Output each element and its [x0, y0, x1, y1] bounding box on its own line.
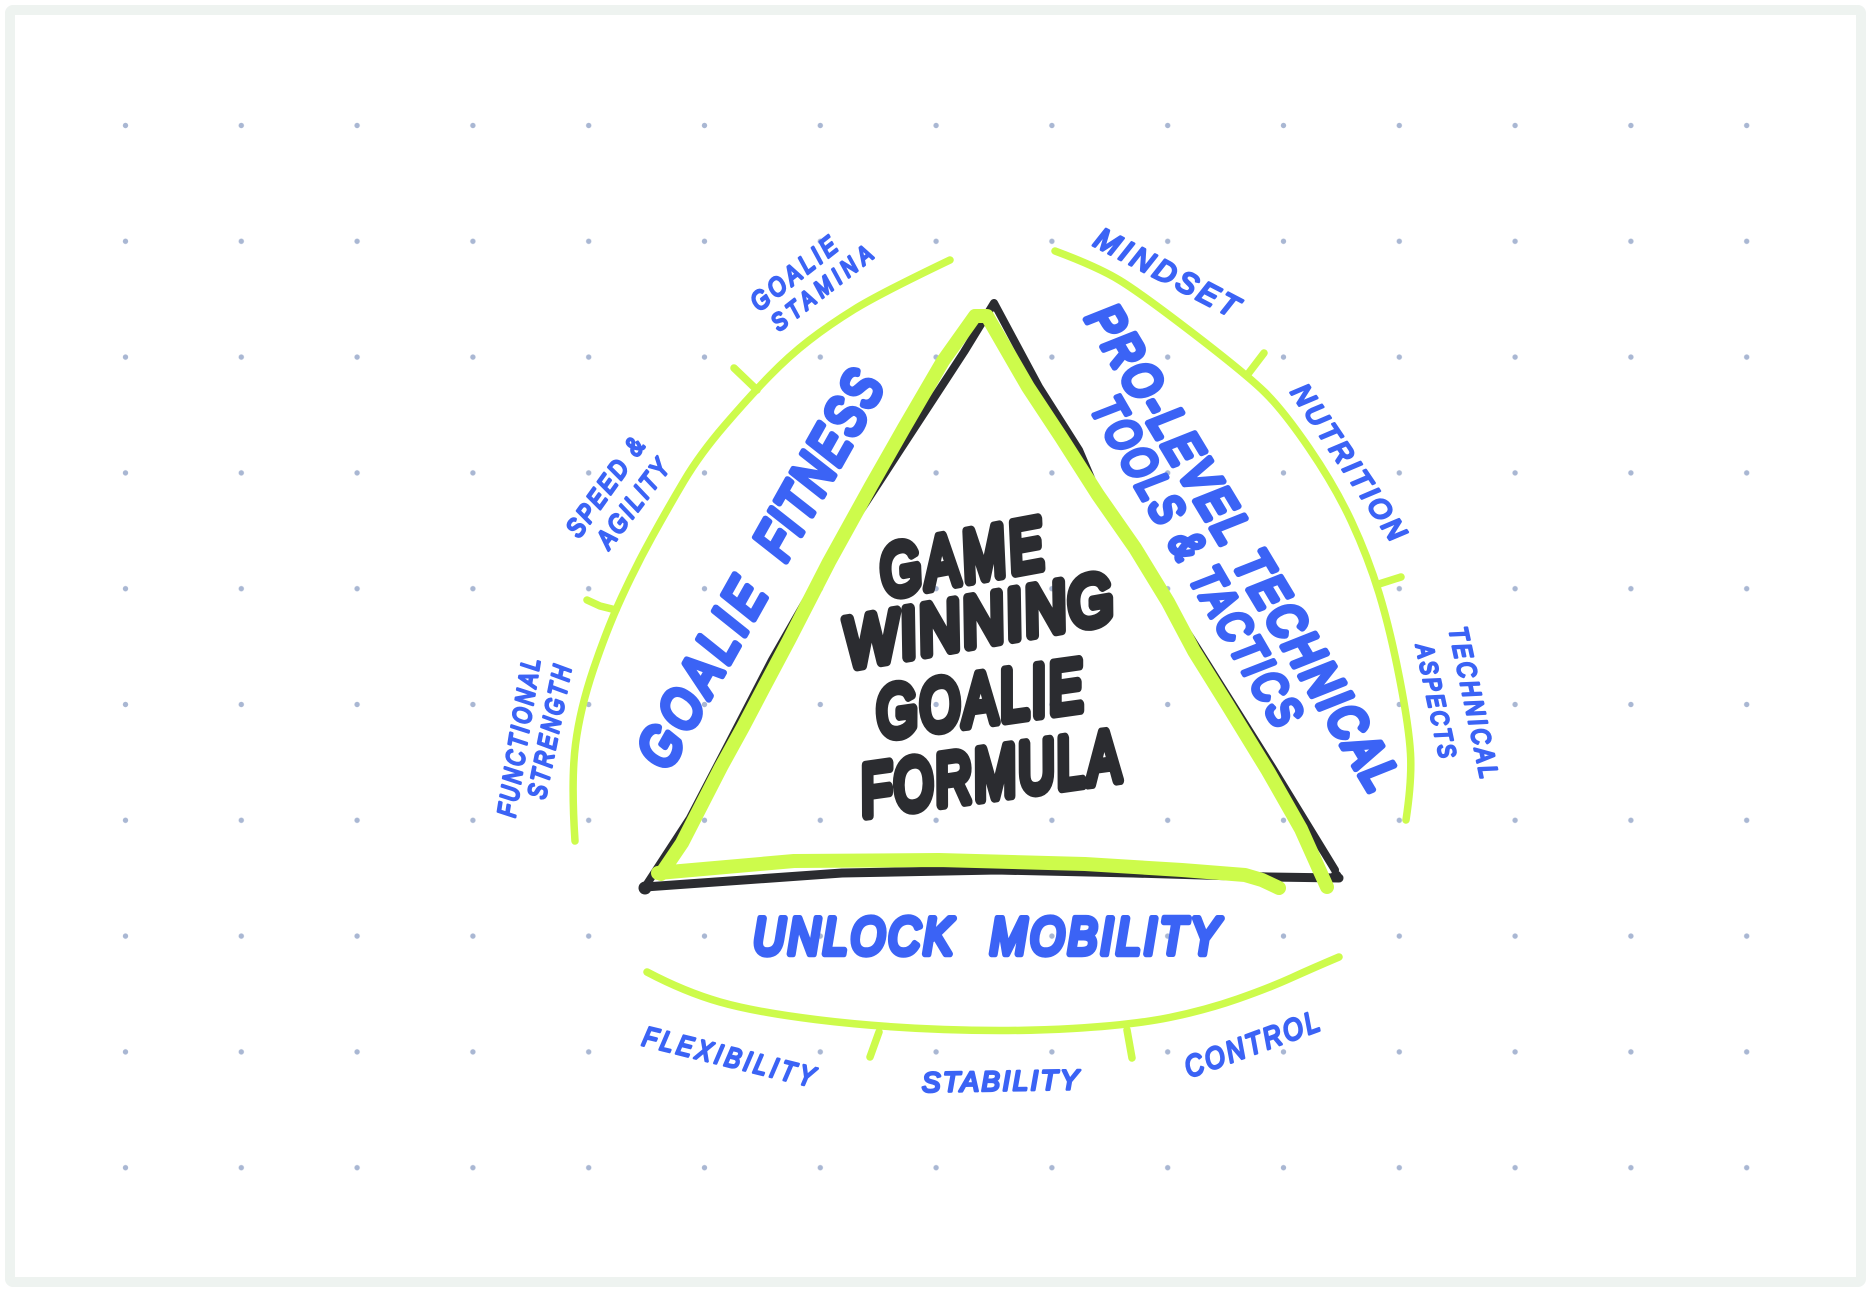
bottom arc: [647, 957, 1339, 1031]
dark triangle outline: [640, 303, 1340, 893]
label: Functional Strength: [492, 656, 577, 819]
heading: Goalie Fitness: GOALIE: [625, 568, 780, 778]
bottom arc with labels: [639, 957, 1339, 1098]
label: Speed and Agility: [561, 432, 677, 555]
label: Speed and Agility: AGILITY: [590, 453, 677, 555]
label: Technical Aspects: TECHNICAL: [1443, 624, 1503, 781]
heading: Goalie Fitness: FITNESS: [741, 360, 896, 569]
label: Flexibility: FLEXIBILITY: [639, 1020, 820, 1094]
heading: Unlock Mobility: MOBILITY: [990, 908, 1223, 966]
heading: Pro-Level Technical Tools and Tactics: TOOLS & TACTICS: [1081, 387, 1313, 735]
right arc: [1055, 251, 1411, 820]
bottom arc ticks: [870, 1030, 1132, 1058]
right arc ticks: [1248, 353, 1401, 584]
title: Game Winning Goalie Formula: FORMULA: [855, 716, 1126, 832]
left arc ticks: [587, 368, 757, 610]
heading: Unlock Mobility: UNLOCK: [753, 908, 954, 966]
title: Game Winning Goalie Formula: GOALIE: [871, 645, 1089, 754]
label: Control: CONTROL: [1180, 1004, 1324, 1084]
right arc with labels: [1055, 222, 1503, 820]
title: Game Winning Goalie Formula: WINNING: [837, 558, 1119, 683]
label: Functional Strength: STRENGTH: [522, 662, 577, 801]
label: Goalie Stamina: GOALIE: [745, 231, 844, 317]
label: Technical Aspects: [1410, 624, 1503, 781]
label: Functional Strength: FUNCTIONAL: [492, 656, 545, 819]
heading: Goalie Fitness: [625, 360, 896, 778]
green triangle highlight: [658, 316, 1327, 888]
title: Game Winning Goalie Formula: [837, 504, 1126, 832]
triangle diagram: [640, 303, 1340, 893]
left arc: [573, 260, 950, 841]
label: Stability: STABILITY: [922, 1064, 1081, 1098]
label: Speed and Agility: SPEED &: [561, 432, 651, 543]
label: Goalie Stamina: STAMINA: [766, 240, 878, 336]
left arc with labels: [492, 231, 950, 841]
title: Game Winning Goalie Formula: GAME: [873, 504, 1051, 613]
label: Nutrition: NUTRITION: [1285, 378, 1413, 547]
label: Mindset: MINDSET: [1089, 222, 1247, 325]
heading: Pro-Level Technical Tools and Tactics: PRO-LEVEL TECHNICAL: [1076, 295, 1410, 800]
heading: Unlock Mobility: [753, 908, 1223, 966]
label: Technical Aspects: ASPECTS: [1410, 640, 1461, 760]
